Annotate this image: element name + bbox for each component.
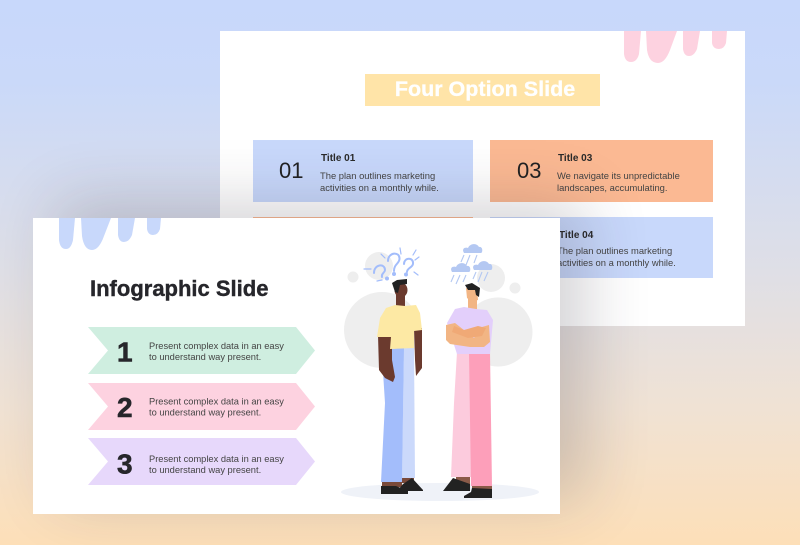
arrow item 3: Present complex data in an easy xyxy=(149,454,284,464)
icon: question marks xyxy=(364,248,419,281)
card 01: The plan outlines marketing xyxy=(320,170,435,181)
arrow item 3 xyxy=(88,438,315,485)
person: right xyxy=(443,283,493,498)
arrow item 2 xyxy=(88,383,315,430)
card 04: The plan outlines marketing xyxy=(557,245,672,256)
decorative blue drips xyxy=(59,218,161,250)
heading banner xyxy=(365,74,600,106)
heading banner: Four Option Slide xyxy=(395,77,575,101)
backdrop circles xyxy=(344,252,532,368)
card 04: Title 04 xyxy=(559,230,594,241)
card 02 (hidden behind front slide) xyxy=(253,217,473,279)
card 01: activities on a monthly while. xyxy=(320,182,439,193)
heading: Infographic Slide xyxy=(90,276,268,301)
card 03: We navigate its unpredictable xyxy=(557,170,680,181)
decorative pink drips xyxy=(624,31,727,63)
arrow item 2: Present complex data in an easy xyxy=(149,396,284,406)
panel: front slide, infographic slide xyxy=(33,218,560,514)
card 04 xyxy=(490,217,713,278)
arrow item 1: 1 xyxy=(117,336,133,368)
arrow item 1: Present complex data in an easy xyxy=(149,341,284,351)
card 03: Title 03 xyxy=(558,153,593,164)
card 01 xyxy=(253,140,473,202)
person: left xyxy=(377,279,423,494)
arrow item 2: to understand way present. xyxy=(149,408,261,418)
card 01: Title 01 xyxy=(321,153,356,164)
arrow item 3: to understand way present. xyxy=(149,465,261,475)
arrow item 2: 2 xyxy=(117,392,133,423)
card 03 xyxy=(490,140,713,202)
arrow item 1: to understand way present. xyxy=(149,352,261,362)
card 04: activities on a monthly while. xyxy=(557,257,676,268)
icon: rain clouds xyxy=(451,244,492,284)
illustration: two people xyxy=(341,244,539,501)
card 03: 03 xyxy=(517,158,541,183)
card 01: 01 xyxy=(279,158,303,183)
panel: back slide, four option slide xyxy=(220,31,745,326)
arrow item 3: 3 xyxy=(117,448,133,480)
ground shadow xyxy=(341,483,539,501)
arrow item 1 xyxy=(88,327,315,374)
card 03: landscapes, accumulating. xyxy=(557,182,667,193)
